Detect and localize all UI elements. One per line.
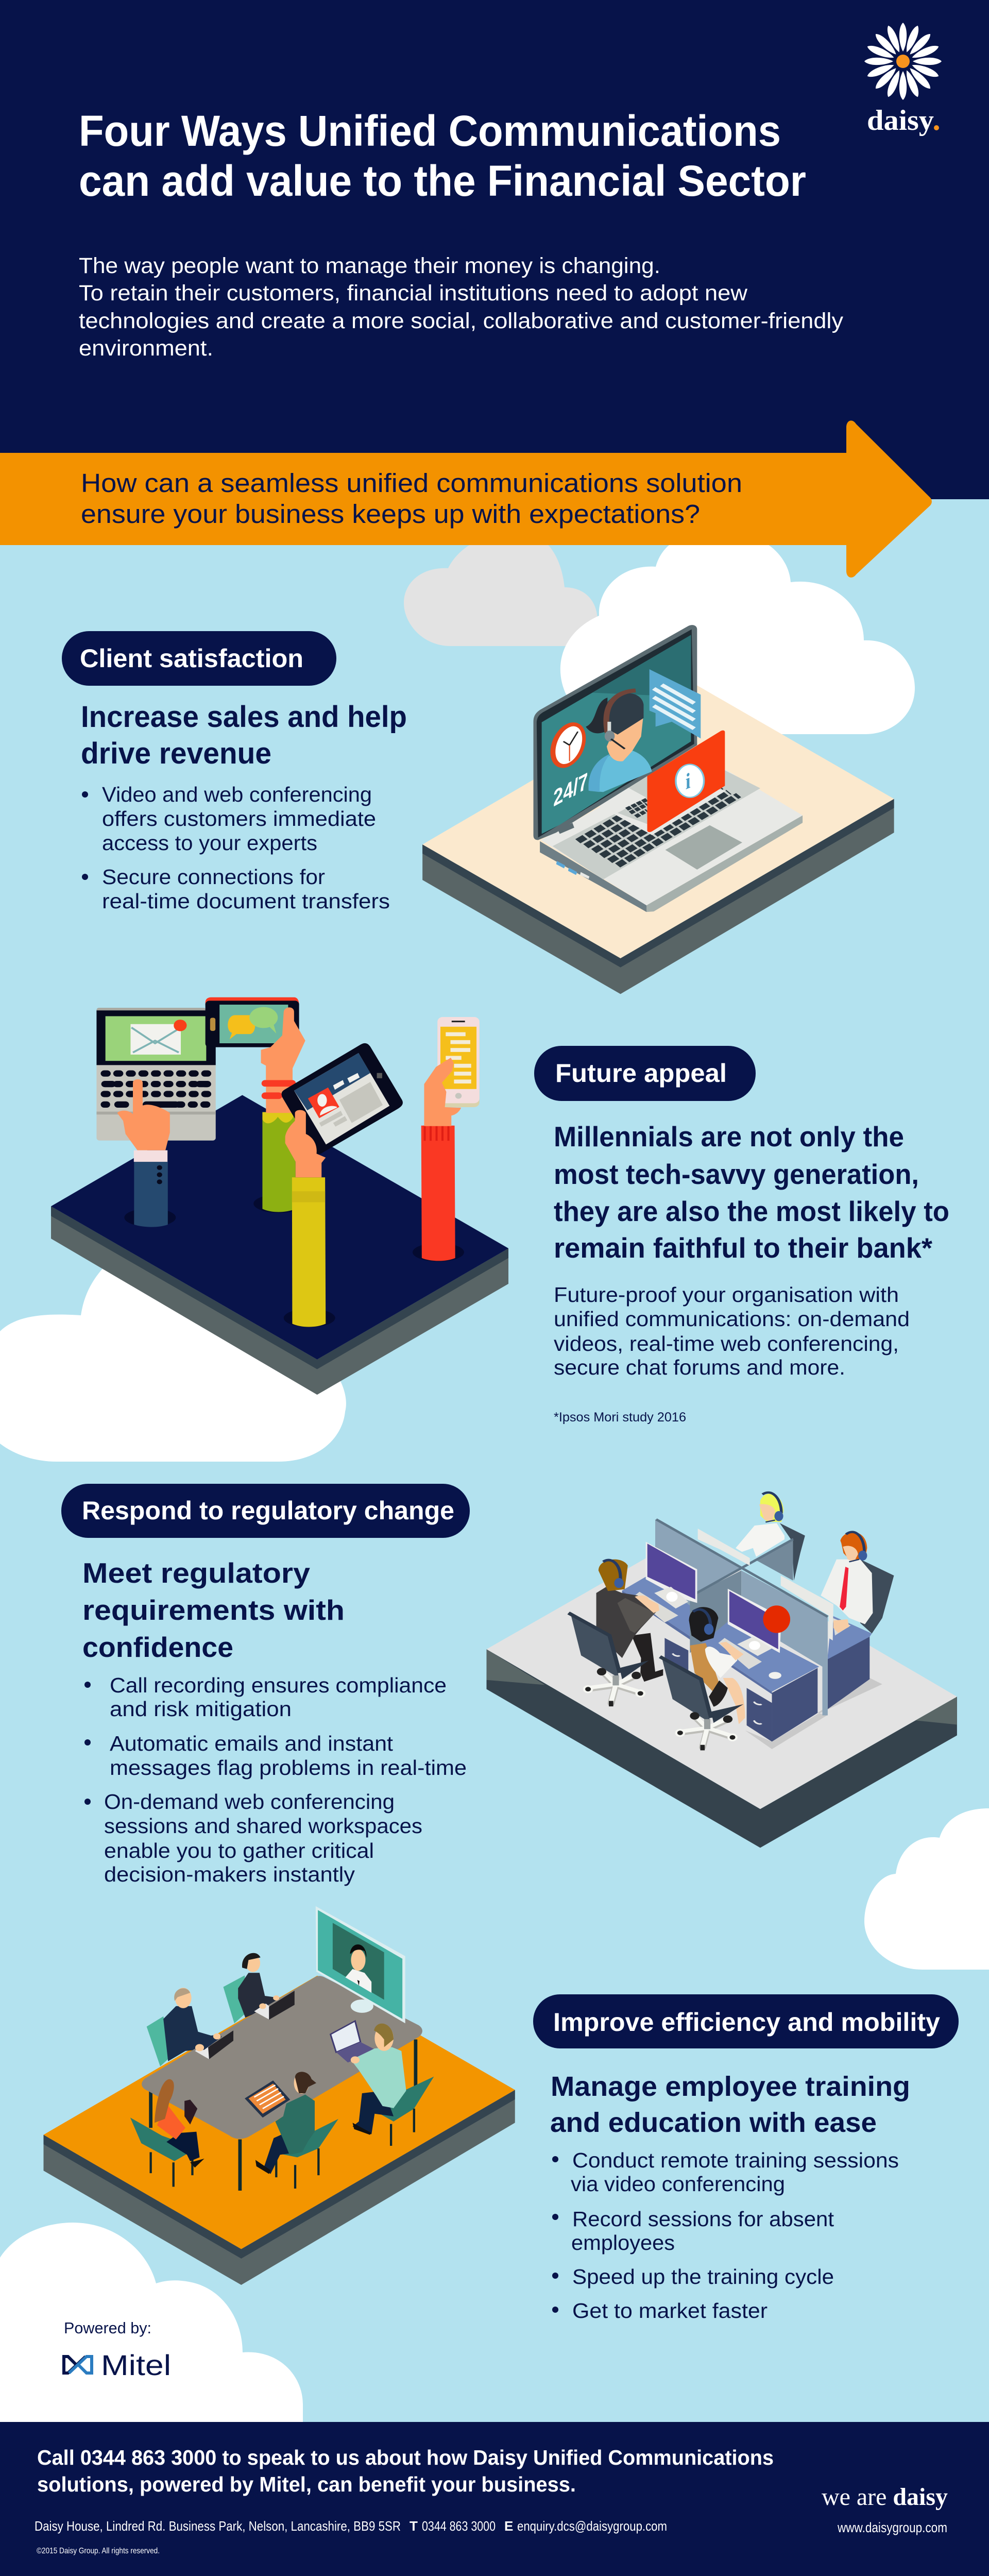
address and contact [35,2518,667,2534]
arrow banner [0,420,932,578]
address and contact: T [410,2518,418,2534]
monitors [633,1542,851,1679]
bullets: and risk mitigation [110,1697,292,1721]
body text: secure chat forums and more. [554,1355,845,1379]
heading pill: Future appeal [555,1059,727,1088]
tablet on table [245,2080,290,2117]
we are daisy: we are daisy [822,2483,948,2511]
logo: Mitel [64,2349,171,2381]
bullets: Record sessions for absent [572,2207,834,2231]
hand on tablet [285,1110,326,1177]
arm: green sleeve [262,1063,296,1212]
subheading: and education with ease [550,2107,877,2138]
info panel [647,731,725,832]
subheading: confidence [82,1631,233,1663]
wordmark: daisy [867,105,934,137]
platform [43,1976,515,2285]
icon: clock [545,720,591,770]
cloud: grey behind laptop [404,531,598,646]
cloud: white right edge [864,1808,989,1970]
arm: blue sleeve [117,1079,170,1227]
bullets: On-demand web conferencing [104,1790,395,1814]
back left person [147,1988,211,2066]
subheading: Meet regulatory [82,1557,310,1589]
holes [124,1194,464,1327]
subheading [554,1121,949,1264]
heading pill [533,1994,959,2048]
subheading [82,1557,345,1663]
subheading: Increase sales and help [81,700,407,734]
bullets: employees [571,2231,675,2255]
bullets: Automatic emails and instant [110,1732,394,1755]
laptop [540,753,803,912]
title [79,107,806,205]
person right with red tie [821,1532,894,1634]
bullets: Call recording ensures compliance [110,1673,447,1697]
subheading: they are also the most likely to [554,1195,949,1227]
heading pill: Client satisfaction [80,644,303,673]
footnote: *Ipsos Mori study 2016 [554,1410,686,1425]
section 4: efficiency and mobility [43,1906,959,2323]
powered by: Powered by: [64,2319,151,2337]
heading pill [62,631,336,686]
arrow text [81,468,742,529]
cloud: white behind hands platform [0,1257,346,1462]
subheading: requirements with [82,1594,345,1626]
alert dot [763,1605,790,1633]
heading pill: Improve efficiency and mobility [553,2008,940,2037]
platform [51,1095,508,1395]
illustration: call centre on grey platform [486,1493,957,1848]
cloud: white bottom left [0,2223,303,2422]
subheading [81,700,407,770]
title: can add value to the Financial Sector [79,157,806,205]
bullets: access to your experts [102,831,317,855]
tablet device [282,1043,403,1154]
logo: daisy [864,23,942,137]
wordmark dot [934,125,939,130]
laptops on table [195,1991,378,2062]
bullets: Get to market faster [572,2299,768,2323]
heading pill [534,1046,756,1101]
bullets: Speed up the training cycle [572,2265,834,2289]
bullets [82,783,390,913]
illustration: meeting on orange platform [43,1906,515,2285]
bullets: Secure connections for [102,865,325,889]
agent [586,690,652,792]
address and contact: E [504,2518,513,2534]
body text: videos, real-time web conferencing, [554,1332,899,1355]
heading pill: Respond to regulatory change [82,1496,454,1525]
intro text: The way people want to manage their money is changing. [79,253,660,278]
bullets: Conduct remote training sessions [572,2148,899,2172]
bullets: offers customers immediate [102,807,376,831]
call to action: solutions, powered by Mitel, can benefit your business. [37,2472,576,2496]
laptop device [96,1008,216,1141]
24/7 label: 24/7 [553,768,588,812]
bullets: enable you to gather critical [104,1839,374,1862]
bullets [84,1673,467,1886]
phone white [437,1017,480,1107]
front left person [130,2079,204,2187]
arm: red sleeve [421,1126,455,1261]
table legs [151,2040,416,2128]
hand on phone white [424,1058,461,1126]
desks [622,1577,872,1741]
front centre person [255,2072,338,2189]
subheading: drive revenue [81,737,271,770]
section 3: regulatory change [61,1484,957,1886]
section 1: client satisfaction [62,625,894,994]
bullets: real-time document transfers [102,889,390,913]
icon: daisy flower [864,23,942,100]
bullets: decision-makers instantly [104,1862,355,1886]
intro text: technologies and create a more social, collaborative and customer-friendly [79,309,844,333]
illustration: hands on navy platform [51,997,508,1395]
body text: unified communications: on-demand [554,1307,910,1331]
heading pill [61,1484,470,1538]
bullets: via video conferencing [571,2172,785,2196]
header panel [0,0,989,499]
bullets: messages flag problems in real-time [110,1756,467,1780]
body text [554,1283,910,1379]
subheading: Millennials are not only the [554,1121,904,1153]
cubicle partitions [655,1519,833,1716]
subheading [550,2071,910,2138]
screen [534,625,697,840]
screen with remote person [316,1906,405,2023]
arrow shape [0,420,932,578]
small laptop behind panel [596,776,726,835]
platform [422,685,894,994]
call to action [37,2446,774,2496]
footer panel [0,2422,989,2576]
address and contact: Daisy House, Lindred Rd. Business Park, Nelson, Lancashire, BB9 5SR [35,2518,401,2534]
arrow text: ensure your business keeps up with expectations? [81,499,700,529]
person front with chair [660,1607,745,1750]
subheading: remain faithful to their bank* [554,1232,933,1264]
bullets: Video and web conferencing [102,783,372,806]
hand on phone [261,1007,305,1080]
address and contact: 0344 863 3000 [422,2518,496,2534]
partition back and person top [736,1493,805,1581]
arm: yellow sleeve [292,1177,326,1327]
bullets [552,2148,899,2323]
chat bubble [650,669,701,738]
title: Four Ways Unified Communications [79,107,781,155]
website: www.daisygroup.com [837,2520,947,2535]
person left with chair [569,1560,663,1706]
platform [486,1537,957,1848]
intro text [79,253,844,361]
subheading: most tech-savvy generation, [554,1158,919,1190]
bullets: sessions and shared workspaces [104,1814,422,1838]
call to action: Call 0344 863 3000 to speak to us about how Daisy Unified Communications [37,2446,774,2469]
wordmark Mitel: Mitel [101,2349,171,2381]
illustration: laptop on cream platform [422,625,894,994]
copyright: ©2015 Daisy Group. All rights reserved. [37,2547,160,2555]
icon: Mitel loops [64,2357,92,2373]
address and contact: enquiry.dcs@daisygroup.com [517,2518,667,2534]
back right person [223,1953,280,2023]
table [142,1976,422,2191]
intro text: To retain their customers, financial institutions need to adopt new [79,281,748,306]
info panel: i [686,768,691,794]
front right person [351,2024,434,2146]
subheading: Manage employee training [551,2071,910,2102]
phone device [206,997,299,1047]
intro text: environment. [79,336,213,361]
arrow text: How can a seamless unified communications solution [81,468,742,498]
body text: Future-proof your organisation with [554,1283,899,1307]
cloud: white behind laptop [560,531,915,734]
section 2: future appeal [51,997,949,1425]
